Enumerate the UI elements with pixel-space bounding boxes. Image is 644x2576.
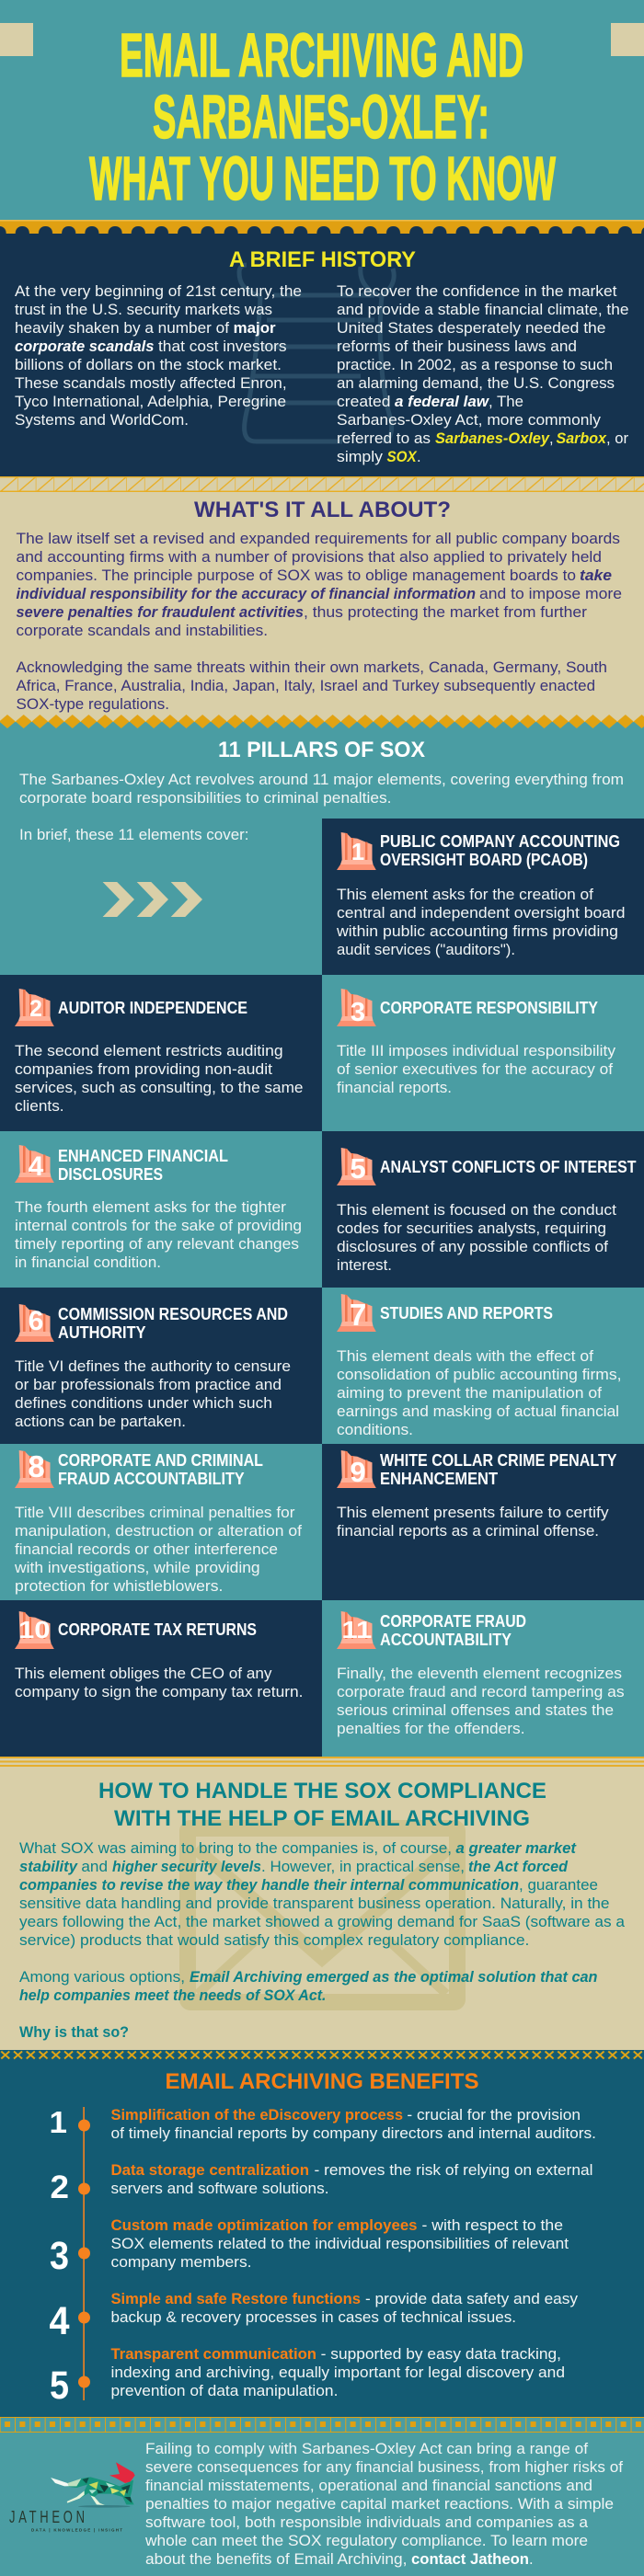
text block: codes for securities analysts, requiring [337,1220,606,1237]
logo tagline: DATA | KNOWLEDGE | INSIGHT [31,2527,122,2533]
heading [98,1779,546,1831]
panel: pillar 10 [0,1600,322,1757]
text block: The second element restricts auditing [15,1043,283,1059]
panel: how to handle SOX compliance [19,1779,626,2041]
text block: actions can be partaken. [15,1414,186,1430]
benefit 1: Simplification of the eDiscovery process [110,2107,403,2124]
icon: pillar 10: 10 [18,1616,50,1643]
icon: fox [51,2462,135,2508]
text block: financial reports as a criminal offense. [337,1523,599,1540]
text block: intro: The Sarbanes-Oxley Act revolves around 11 major elements, covering everything from [19,772,624,788]
benefit 4: Simple and safe Restore functions [110,2291,361,2307]
text block: history right column: and provide a stable financial climate, the [337,302,629,318]
icon: pillar 6 [15,1304,54,1342]
heading: FRAUD ACCOUNTABILITY [58,1469,245,1488]
text block: law description: severe penalties for fraudulent activities [17,604,304,621]
logo wordmark: JATHEON [9,2508,85,2527]
icon: pillar 1 [337,832,376,870]
benefit 5 [50,2346,565,2408]
text block: history left column: trust in the U.S. security markets was [15,302,272,318]
benefit 5: - supported by easy data tracking, [321,2346,561,2363]
panel: pillar 2 [0,975,322,1131]
text block: law description: corporate scandals and instabilities. [17,623,268,639]
heading: CORPORATE TAX RETURNS [58,1620,257,1639]
icon: pillar 2 [15,989,54,1026]
heading: ACCOUNTABILITY [380,1630,512,1649]
text block: closing: severe consequences for any financial business, from higher risks of [145,2459,623,2476]
panel: pillar 6 [0,1288,322,1444]
text block: history left column: These scandals mostly affected Enron, [15,375,287,392]
corner tab left [0,23,33,56]
text block: financial reports. [337,1080,452,1096]
text block: what SOX aimed at: service) products that would satisfy this complex regulatory compliance. [19,1932,529,1949]
text block: law description: , thus protecting the market from further [304,604,588,621]
text block: Title VIII describes criminal penalties for [15,1505,295,1521]
panel: pillar 9 [322,1444,644,1600]
text block: what SOX aimed at: sensitive data handling and provide transparent business operation. Naturally, in the [19,1895,609,1912]
text block: Finally, the eleventh element recognizes [337,1666,622,1682]
benefit 5: prevention of data manipulation. [110,2383,338,2399]
text block: of senior executives for the accuracy of [337,1061,613,1078]
logo: Jatheon [9,2462,135,2533]
benefit 3: company members. [110,2254,252,2271]
text block [15,1043,304,1115]
icon: pillar 5: 5 [350,1152,366,1185]
benefit 1: - crucial for the provision [407,2107,581,2124]
text block: law description: take [580,567,612,584]
panel: pillar 8 [14,1449,302,1595]
text block: internal controls for the sake of providing [15,1218,302,1234]
text block: disclosures of any possible conflicts of [337,1239,608,1255]
text block: history left column: corporate scandals [15,338,154,355]
icon: pillar 4: 4 [29,1151,44,1182]
text block: history right column: an alarming demand, the U.S. Congress [337,375,615,392]
text block: what SOX aimed at: , guarantee [519,1877,598,1894]
text block: what SOX aimed at: and [81,1859,108,1875]
text block: consolidation of public accounting firms, [337,1367,622,1383]
text block: closing: financial misstatements, operational and financial sanctions and [145,2478,592,2494]
text block: history right column: a federal law [395,394,489,410]
text block: earnings and masking of actual financial [337,1403,619,1420]
text block: why is that so: Why is that so? [19,2024,129,2041]
text block: company to sign the company tax return. [15,1684,304,1700]
text block: history right column: , or [606,430,629,447]
benefit 5: 5 [50,2364,69,2408]
benefit 3: - with respect to the [421,2217,563,2234]
heading: CORPORATE FRAUD [380,1611,526,1631]
benefit 3 [50,2217,569,2278]
panel: pillar 4 [15,1145,302,1271]
icon: pillar 11 [337,1611,376,1649]
icon: pillar 5 [337,1148,376,1185]
text block: other countries: Acknowledging the same threats within their own markets, Canada, Germany, South [17,659,607,676]
text block: other countries [17,659,607,713]
text block: what SOX aimed at: higher security levels [112,1859,261,1875]
benefit 1: 1 [50,2105,67,2139]
text block: history left column [15,283,302,429]
benefit 4: - provide data safety and easy [365,2291,579,2307]
text block: This element obliges the CEO of any [15,1666,272,1682]
heading [380,831,620,869]
icon: pillar 6: 6 [29,1306,43,1336]
text block: what SOX aimed at: stability [19,1859,78,1875]
text block: history right column: To recover the confidence in the market [337,283,617,300]
panel: email archiving benefits [50,2069,596,2408]
heading: WITH THE HELP OF EMAIL ARCHIVING [114,1806,530,1831]
text block: in financial condition. [15,1254,161,1271]
panel: pillar 11 [337,1611,625,1737]
text block: law description [17,531,622,639]
heading: AUTHORITY [58,1322,146,1342]
text block: law description: individual responsibility for the accuracy of financial information [17,586,476,602]
heading: STUDIES AND REPORTS [380,1303,553,1322]
text block: closing: Failing to comply with Sarbanes-Oxley Act can bring a range of [145,2441,588,2457]
text block: history right column: SOX [386,449,418,465]
text block: The fourth element asks for the tighter [15,1199,287,1216]
benefit 4 [50,2291,579,2343]
icon: envelope watermark [188,1828,457,2002]
heading [58,1450,263,1488]
text block [14,1505,302,1595]
text block: history left column: Systems and WorldCom. [15,412,189,429]
text block: aiming to prevent the manipulation of [337,1385,602,1402]
text block: optimal solution: Among various options, [19,1969,185,1986]
text block: history right column: practice. In 2002, as a response to such [337,357,613,373]
text block: what SOX aimed at: What SOX was aiming to bring to the companies is, of course, [19,1840,452,1857]
text block: closing: software tool, both responsible individuals and companies as a [145,2514,589,2531]
heading [380,1611,526,1649]
icon: pillar 2: 2 [29,996,42,1022]
text block: with investigations, while providing [14,1560,260,1576]
text block [337,1202,616,1274]
icon: pillar 3: 3 [351,998,365,1027]
benefit 3: SOX elements related to the individual responsibilities of relevant [110,2236,569,2252]
text block: optimal solution [19,1969,598,2004]
text block: audit services ("auditors"). [337,942,515,958]
text block: corporate fraud and record tampering as [337,1684,625,1700]
heading: HOW TO HANDLE THE SOX COMPLIANCE [98,1779,546,1803]
text block: serious criminal offenses and states the [337,1702,614,1719]
text block: penalties for the offenders. [337,1721,524,1737]
panel: 11 pillars of SOX [0,738,644,1757]
text block: what SOX aimed at [19,1840,626,1949]
heading: A BRIEF HISTORY [229,247,416,272]
text block: history right column: , [549,430,554,447]
text block: companies from providing non-audit [15,1061,272,1078]
benefit 2: servers and software solutions. [110,2181,329,2197]
text block: Title III imposes individual responsibility [337,1043,616,1059]
text block: optimal solution: help companies meet the needs of SOX Act. [19,1987,326,2004]
text block: protection for whistleblowers. [15,1578,223,1595]
benefit 5: indexing and archiving, equally important for legal discovery and [110,2364,565,2381]
timeline [78,2107,90,2400]
text block: history left column: At the very beginning of 21st century, the [15,283,302,300]
text block: closing: penalties to major negative capital market reactions. With a simple [145,2496,614,2513]
heading: DISCLOSURES [58,1164,163,1184]
icon: chevron arrows [103,882,202,917]
text block: intro [19,772,624,843]
heading [58,1146,228,1184]
text block: central and independent oversight board [337,905,626,922]
text block: closing [144,2441,623,2568]
text block: history right column: , The [489,394,523,410]
text block: history right column: Sarbanes-Oxley [435,430,550,447]
benefit 1 [50,2105,596,2142]
icon: pillar 3 [337,989,376,1027]
text block: history right column: . [417,449,421,465]
benefit 2 [50,2162,592,2205]
icon: pillar 9: 9 [350,1456,366,1488]
benefit 3: Custom made optimization for employees [110,2217,417,2234]
text block: history right column: United States desperately needed the [337,320,605,337]
text block: history right column: created [337,394,390,410]
text block: closing: about the benefits of Email Archiving, [145,2551,407,2568]
text block: This element presents failure to certify [337,1505,609,1521]
heading: COMMISSION RESOURCES AND [58,1304,288,1323]
text block: services, such as consulting, to the same [15,1080,304,1096]
benefit 2: - removes the risk of relying on external [315,2162,592,2179]
text block: other countries: SOX-type regulations. [17,696,169,713]
text block: history right column: Sarbanes-Oxley Act, more commonly [337,412,602,429]
text block [15,1666,304,1700]
heading: CORPORATE AND CRIMINAL [58,1450,263,1470]
heading: AUDITOR INDEPENDENCE [58,998,247,1017]
text block: This element is focused on the conduct [337,1202,616,1219]
text block [15,1358,291,1430]
text block: what SOX aimed at: . However, in practical sense, [261,1859,465,1875]
text block: This element asks for the creation of [337,887,593,903]
text block: manipulation, destruction or alteration of [15,1523,302,1540]
text block: history left column: that cost investors [158,338,287,355]
text block: intro: corporate board responsibilities to criminal penalties. [19,790,392,807]
corner tab right [611,23,644,56]
text block: what SOX aimed at: companies to revise the way they handle their internal communication [19,1877,519,1894]
text block: conditions. [337,1422,413,1438]
panel: footer [9,2441,623,2568]
text block: history right column [337,283,629,465]
text block: optimal solution: Email Archiving emerged as the optimal solution that can [190,1969,598,1986]
text block: what SOX aimed at: the Act forced [468,1859,569,1875]
panel: pillar 3 [337,989,616,1096]
text block: what SOX aimed at: a greater market [456,1840,578,1857]
panel: pillar 7 [337,1294,622,1438]
text block: timely reporting of any relevant changes [15,1236,299,1253]
benefit 4: backup & recovery processes in cases of technical issues. [110,2309,516,2326]
heading: WHAT'S IT ALL ABOUT? [194,498,451,522]
panel: pillar 1 [322,819,644,975]
text block: defines conditions under which such [15,1395,272,1412]
benefit 1: of timely financial reports by company directors and internal auditors. [110,2125,596,2142]
text block: history right column: referred to as [337,430,431,447]
benefit 5: Transparent communication [110,2346,316,2363]
panel: a brief history [15,247,629,465]
panel: what's it all about [17,498,622,713]
icon: pillar 7: 7 [350,1298,366,1332]
text block: or bar professionals from practice and [15,1377,282,1393]
icon: pillar 8 [15,1449,54,1488]
text block: other countries: Africa, France, Australia, India, Japan, Italy, Israel and Turkey subsequently enacted [17,678,595,694]
text block: closing: whole can meet the SOX regulatory compliance. To learn more [144,2533,588,2549]
text block: history left column: heavily shaken by a number of [15,320,229,337]
text block: law description: companies. The principle purpose of SOX was to oblige management boards to [17,567,576,584]
panel: pillar 5 [322,1131,644,1288]
text block: history left column: billions of dollars on the stock market. [15,357,282,373]
icon: pillar 4 [15,1145,54,1183]
text block: interest. [337,1257,392,1274]
text block [337,1348,622,1438]
text block [337,1666,625,1737]
text block: history right column: Sarbox [556,430,607,447]
text block: law description: The law itself set a revised and expanded requirements for all public company boards [17,531,620,547]
text block: history left column: major [234,320,276,337]
text block: This element deals with the effect of [337,1348,593,1365]
icon: scroll watermark [239,265,394,441]
heading: ENHANCEMENT [380,1469,499,1488]
icon: pillar 1: 1 [351,838,364,865]
text block [337,1505,609,1540]
icon: pillar 11: 11 [341,1616,372,1643]
heading: OVERSIGHT BOARD (PCAOB) [380,850,588,869]
icon: pillar 9 [337,1450,376,1488]
title [89,21,556,213]
text block: law description: and to impose more [479,586,622,602]
icon: pillar 10 [15,1611,54,1649]
heading: ENHANCED FINANCIAL [58,1146,228,1165]
benefit 3: 3 [50,2234,69,2278]
benefit 4: 4 [50,2299,70,2343]
heading: EMAIL ARCHIVING BENEFITS [166,2069,478,2094]
text block: financial records or other interference [15,1541,278,1558]
text block [336,887,626,958]
benefit 2: Data storage centralization [110,2162,309,2179]
text block: within public accounting firms providing [336,923,618,940]
text block: closing: . [529,2551,534,2568]
heading [380,1450,617,1488]
text block: what SOX aimed at: years following the Act, the market showed a growing demand for SaaS (software as a [19,1914,626,1930]
text block [15,1199,302,1271]
text block: law description: and accounting firms with a number of provisions that also applied to privately held [17,549,602,566]
heading: CORPORATE RESPONSIBILITY [380,998,599,1017]
text block: intro: In brief, these 11 elements cover: [19,827,248,843]
text block: clients. [15,1098,64,1115]
heading [58,1304,288,1342]
benefit 2: 2 [50,2170,69,2205]
text block: Title VI defines the authority to censure [15,1358,291,1375]
text block: history left column: Tyco International, Adelphia, Peregrine [15,394,286,410]
text block: closing: contact Jatheon [411,2551,529,2568]
icon: pillar 7 [337,1294,376,1332]
heading: 11 PILLARS OF SOX [218,738,426,762]
text block [337,1043,616,1096]
text block: history right column: reforms of their business laws and [337,338,577,355]
text block: history right column: simply [337,449,384,465]
icon: pillar 8: 8 [28,1449,45,1483]
